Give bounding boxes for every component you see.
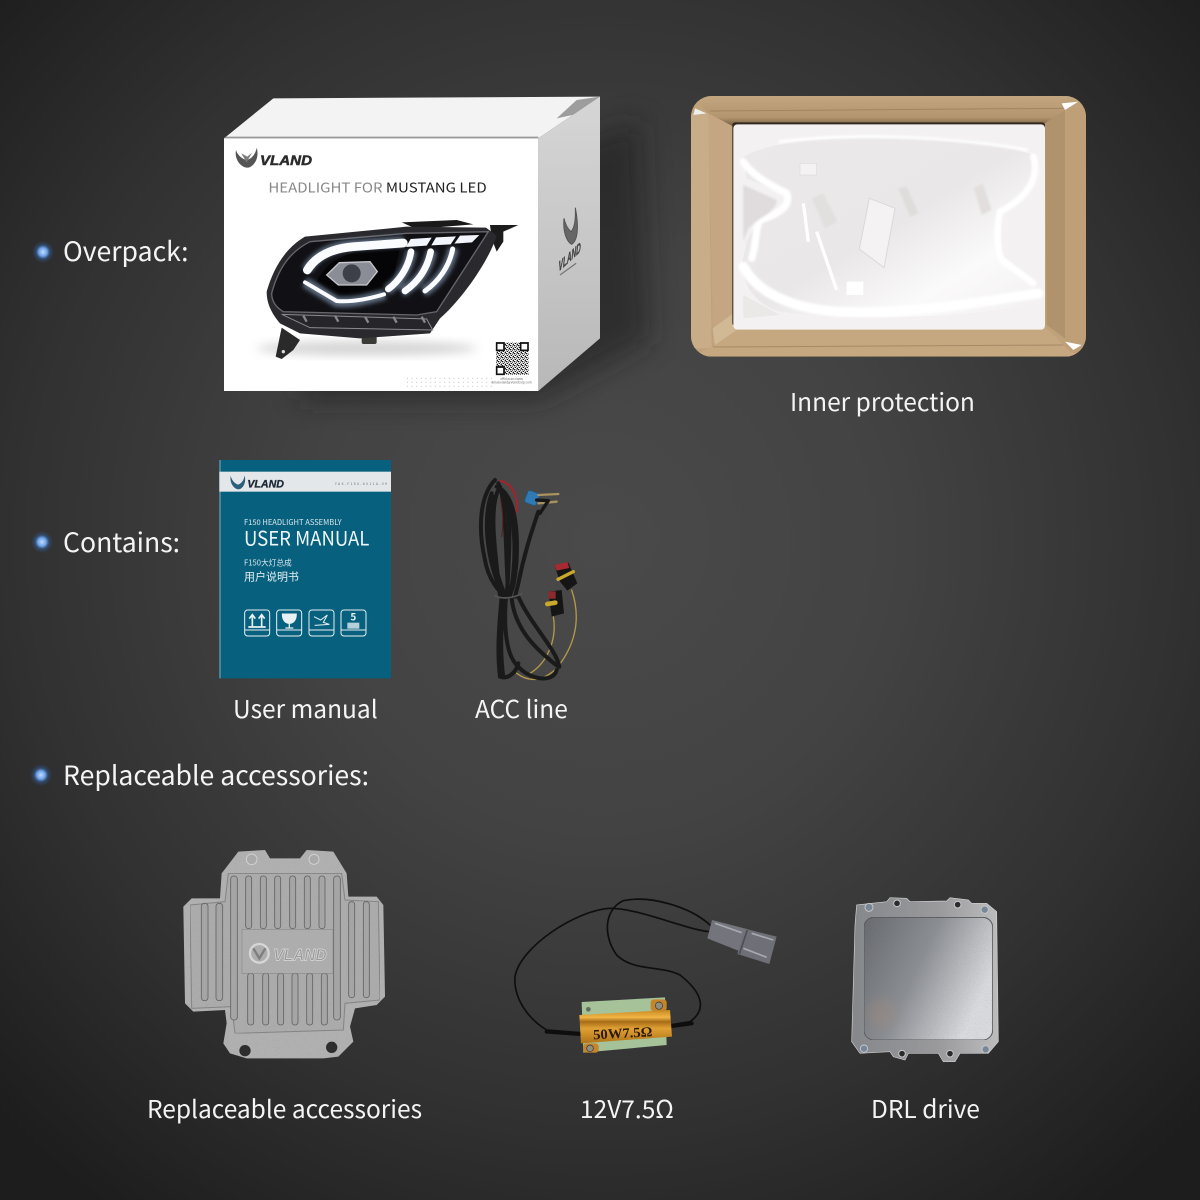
QR caption: official accounts [500, 377, 524, 381]
QR code [496, 342, 529, 381]
QR finder marks [497, 343, 528, 374]
label: Inner protection: Inner protection [790, 384, 975, 419]
DRL drive plate [852, 898, 998, 1062]
manual title: USER MANUAL [244, 523, 369, 552]
user manual [219, 460, 391, 678]
left inner flap [717, 118, 732, 126]
foam pocket bottom [743, 295, 780, 318]
connector 2 red cap [548, 591, 556, 599]
bottom crease [713, 345, 1063, 347]
grey connector [707, 920, 777, 964]
icon: stacking height [341, 608, 366, 636]
box front face [224, 138, 538, 391]
heat sink module [183, 850, 385, 1058]
connector 2 [547, 590, 564, 617]
DRL strips [305, 243, 453, 301]
connector 2 yellow band [547, 603, 555, 604]
brand name: VLAND [260, 152, 312, 168]
manual brand: VLAND [247, 479, 284, 491]
foam notches [803, 203, 837, 290]
plate emblem [250, 944, 269, 963]
bullet: overpack [32, 241, 54, 263]
resistor [515, 899, 777, 1053]
bullet: replaceable accessories [30, 764, 52, 786]
fuse body [537, 500, 548, 513]
holes [894, 900, 961, 1057]
foam shadow pocket [743, 185, 777, 242]
carton shadow [732, 122, 1045, 326]
top grooves [201, 876, 369, 1025]
projector glass [343, 264, 361, 282]
DRL glow [305, 242, 453, 302]
connector highlights [715, 923, 773, 957]
left outer flap [691, 113, 712, 348]
recessed panel [864, 917, 993, 1040]
spine [219, 460, 221, 678]
foam groove 3 [974, 183, 992, 215]
foam groove 1 [812, 193, 837, 228]
red wires [500, 481, 517, 512]
side brand: VLAND [559, 239, 581, 275]
QR email: Email:vland@vlandcorp.com [492, 381, 532, 385]
label: DRL drive: DRL drive [871, 1091, 980, 1126]
corner highlights [1062, 102, 1078, 110]
foam groove 2 [898, 187, 918, 217]
foam tray [733, 124, 1045, 330]
ACC line [481, 480, 577, 679]
product glow and reflection [257, 341, 477, 356]
side small print [560, 263, 577, 276]
turn segments [406, 235, 479, 247]
right outer flap [1076, 108, 1086, 354]
corner flap [713, 313, 737, 345]
box top flap [557, 97, 600, 118]
heading: Contains: Contains: [63, 521, 180, 560]
top flap [691, 96, 1086, 127]
icon: stacking height: 5 [350, 608, 356, 623]
yellow wires [517, 590, 576, 679]
green plate [582, 997, 667, 1053]
icon: do not press [309, 610, 334, 636]
right inner flap [1045, 110, 1065, 338]
box shadow [300, 120, 650, 400]
decorative dots [404, 378, 494, 387]
logo plate [242, 929, 333, 973]
part number: YAX-F150-6011A-09 [334, 481, 388, 486]
bullet: contains [31, 531, 53, 553]
plate brand: VLAND [273, 946, 327, 965]
resistor value: 50W7.5Ω [593, 1025, 653, 1043]
connector step [739, 930, 747, 954]
foam ridge highlights [743, 137, 1038, 312]
ridge shading [224, 137, 538, 138]
box headline: HEADLIGHT FOR MUSTANG LED [268, 177, 487, 197]
lower beads [303, 316, 425, 323]
lower bezel [282, 314, 433, 330]
product box [224, 97, 600, 391]
raised body edge [190, 873, 380, 1033]
emblem inner [241, 153, 252, 162]
logo [236, 148, 312, 168]
foam block [859, 198, 895, 268]
gold body [579, 1010, 672, 1043]
manual emblem [230, 475, 245, 489]
screw 2 [583, 1043, 599, 1053]
headlight [267, 220, 518, 359]
heading: Replaceable accessories: Replaceable accessories: [63, 754, 369, 793]
icon: fragile [277, 610, 302, 636]
connector 1 yellow band [558, 572, 573, 579]
bottom tab [362, 333, 377, 344]
connector 1 [554, 562, 577, 591]
foam tab 2 [800, 163, 817, 175]
bottom flap [700, 348, 1076, 356]
connector 1 red cap [554, 562, 569, 571]
box right face [538, 97, 600, 391]
icon: this way up [245, 610, 270, 636]
Chinese title: 用户说明书 [244, 569, 299, 585]
header band [219, 472, 391, 492]
top bracket [402, 220, 473, 229]
red trace [501, 500, 503, 537]
fuse holder [524, 490, 558, 513]
heading: Overpack: Overpack: [63, 230, 189, 269]
fuse prongs [538, 494, 558, 503]
wires [515, 899, 710, 1034]
projector lens [327, 262, 377, 285]
rear connector [490, 225, 518, 252]
label: User manual: User manual [233, 691, 378, 726]
Chinese subtitle: F150大灯总成 [244, 558, 292, 569]
label: ACC line: ACC line [475, 691, 568, 726]
manual subtitle: F150 HEADLIGHT ASSEMBLY [244, 517, 343, 528]
label: Replaceable accessories: Replaceable accessories [147, 1091, 422, 1126]
connector head [737, 929, 777, 964]
cable tie [495, 594, 522, 598]
mount holes [239, 854, 337, 1056]
inner black panel [317, 248, 400, 302]
box top face [224, 97, 600, 138]
top flap crease [710, 108, 1063, 111]
cable bundle [481, 480, 559, 678]
warm reflection [867, 998, 897, 1028]
carton: inner protection [691, 96, 1086, 357]
side emblem [564, 208, 577, 244]
housing [267, 227, 497, 338]
lens frame [272, 232, 488, 315]
mount [276, 328, 300, 359]
foam tab [847, 282, 863, 295]
screws [860, 903, 989, 1053]
emblem [236, 148, 258, 168]
label: 12V7.5Ω: 12V7.5Ω [580, 1091, 674, 1126]
foam recess [742, 136, 1038, 317]
screw 1 [651, 999, 667, 1011]
plate holes [586, 1007, 591, 1012]
